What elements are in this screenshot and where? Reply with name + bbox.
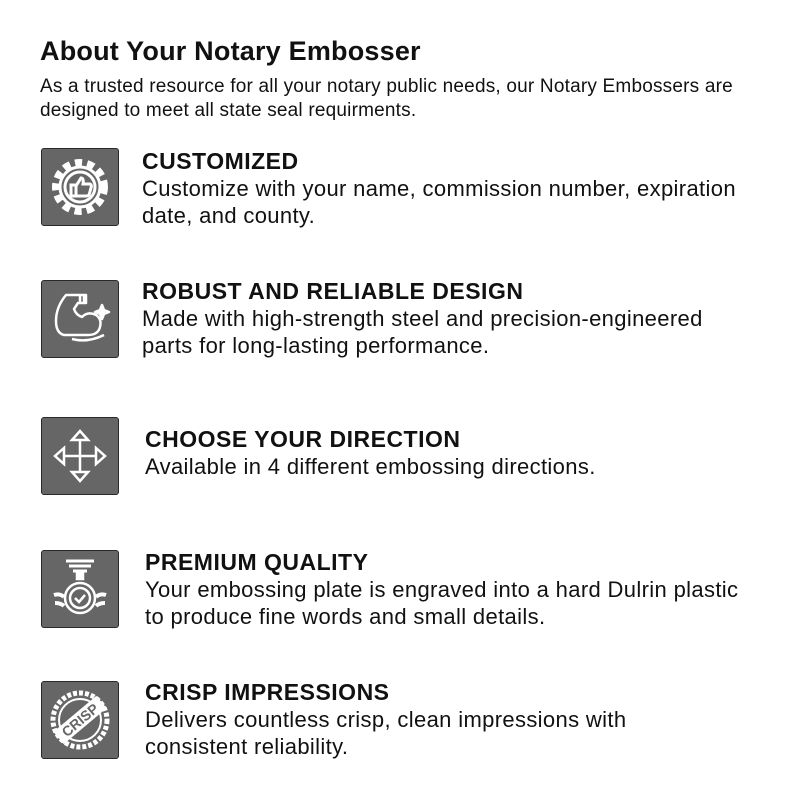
item: robust design: Made with high-strength steel and precision-engineered <box>142 306 703 331</box>
item: direction: CHOOSE YOUR DIRECTION <box>145 426 460 452</box>
subtitle <box>40 76 733 121</box>
icon: four arrows <box>41 417 119 495</box>
item: premium <box>145 549 738 629</box>
item: crisp <box>145 679 626 759</box>
item: customized <box>142 148 736 228</box>
item: premium: to produce fine words and small details. <box>145 604 545 629</box>
icon: crisp seal: CRISP <box>58 700 102 740</box>
subtitle: As a trusted resource for all your notary public needs, our Notary Embossers are <box>40 76 733 97</box>
title: About Your Notary Embosser <box>40 36 421 66</box>
item: crisp: consistent reliability. <box>145 734 348 759</box>
item: direction: Available in 4 different embossing directions. <box>145 454 596 479</box>
item: crisp: CRISP IMPRESSIONS <box>145 679 390 705</box>
icon: crisp seal <box>41 681 119 759</box>
icon: medal <box>41 550 119 628</box>
item: robust design: parts for long-lasting performance. <box>142 333 489 358</box>
icon: gear thumbs up <box>41 148 119 226</box>
item: premium: PREMIUM QUALITY <box>145 549 368 575</box>
item: crisp: Delivers countless crisp, clean impressions with <box>145 707 626 732</box>
item: customized: CUSTOMIZED <box>142 148 299 174</box>
item: customized: date, and county. <box>142 203 315 228</box>
item: direction <box>145 426 596 479</box>
icon: flexed arm <box>41 280 119 358</box>
item: customized: Customize with your name, commission number, expiration <box>142 176 736 201</box>
item: robust design <box>142 278 703 358</box>
subtitle: designed to meet all state seal requirments. <box>40 100 416 121</box>
item: premium: Your embossing plate is engraved into a hard Dulrin plastic <box>145 577 738 602</box>
item: robust design: ROBUST AND RELIABLE DESIGN <box>142 278 523 304</box>
